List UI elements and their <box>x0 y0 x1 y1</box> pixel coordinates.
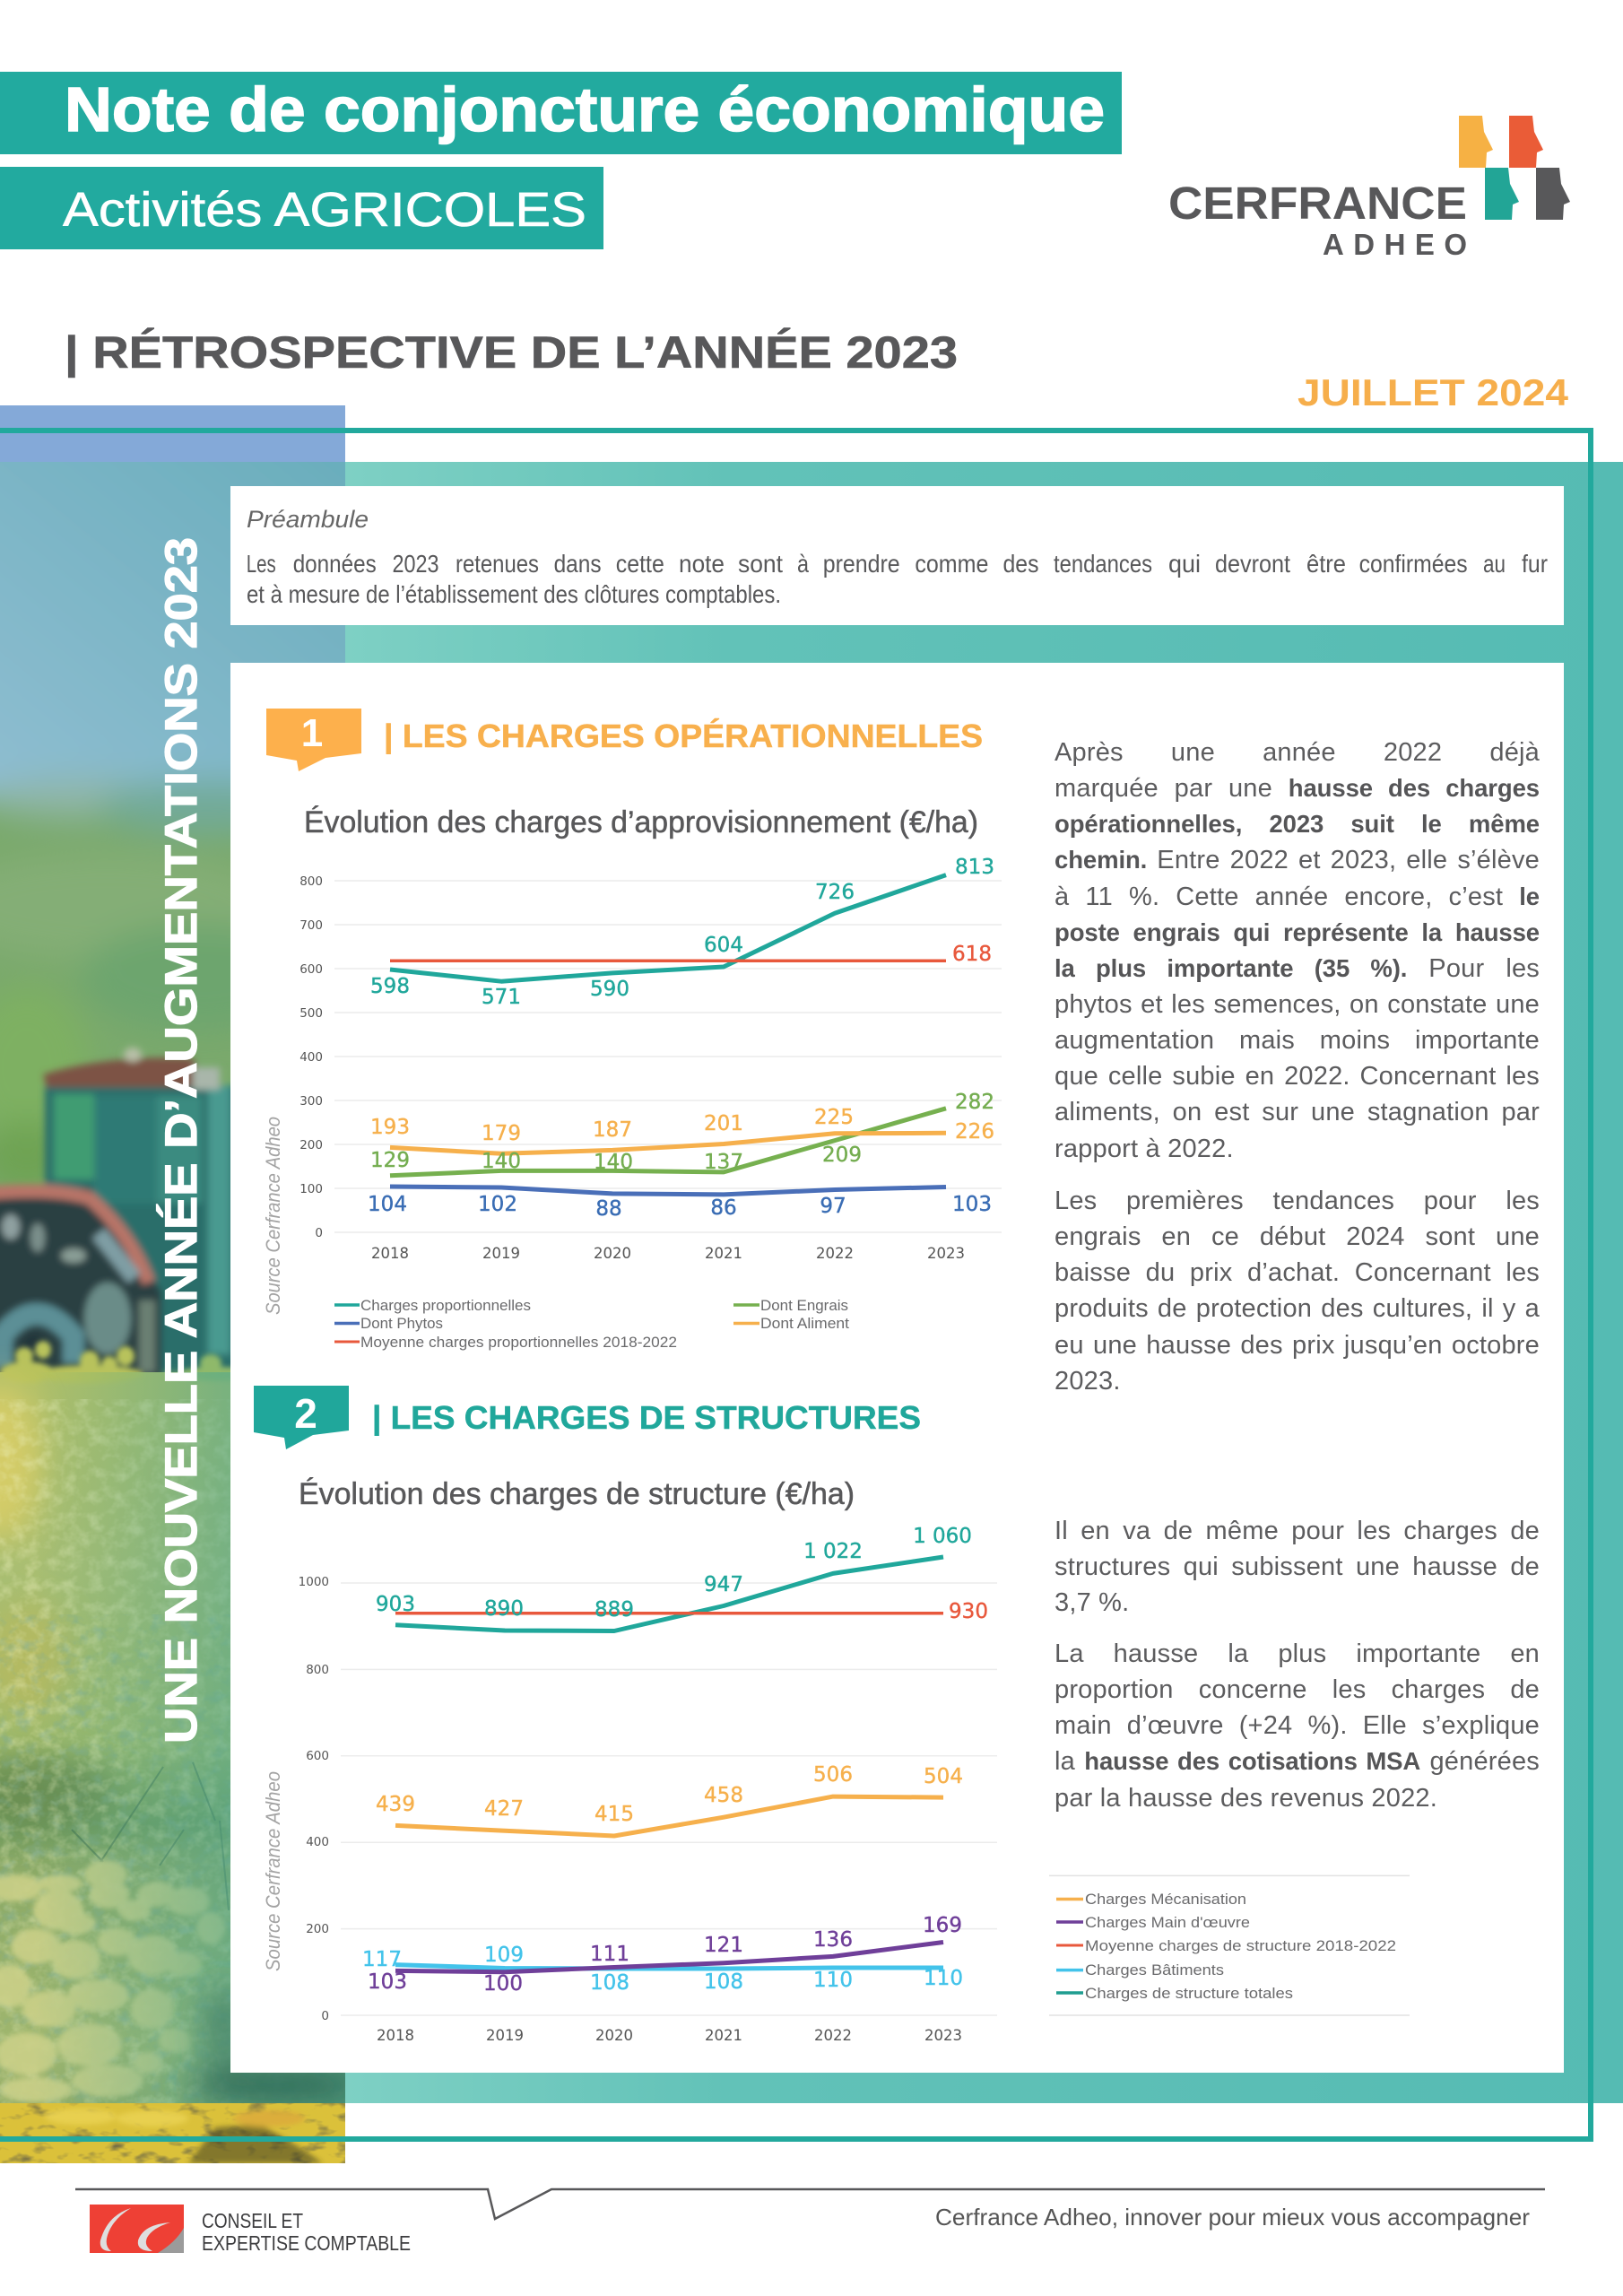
vertical headline: UNE NOUVELLE ANNÉE D’AUGMENTATIONS 2023 <box>156 537 206 1744</box>
text block: charges opérationnelles analysis: aliments, on est sur une stagnation par <box>1055 1098 1540 1126</box>
text block: charges opérationnelles analysis: la plus importante (35 %). Pour les <box>1055 954 1540 983</box>
préambule text: note <box>679 550 725 578</box>
data labels: 136 <box>813 1928 853 1952</box>
y axis: 100 <box>299 1182 323 1196</box>
text block: tendances engrais 2024: eu une hausse des prix jusqu’en octobre <box>1055 1331 1540 1360</box>
data labels: 179 <box>482 1122 521 1145</box>
préambule text: 2023 <box>393 550 439 578</box>
series lines <box>390 875 946 1195</box>
section 1 badge <box>266 709 361 771</box>
chart 2 legend: Charges Mécanisation <box>1085 1891 1246 1908</box>
chart 1 source: Source Cerfrance Adheo <box>262 1117 284 1315</box>
x axis: 2023 <box>927 1245 965 1262</box>
text block: charges opérationnelles analysis: que celle subie en 2022. Concernant les <box>1055 1062 1540 1091</box>
text block: main d'oeuvre: proportion concerne les charges de <box>1055 1675 1540 1704</box>
heading: rétrospective: | RÉTROSPECTIVE DE L’ANNÉE 2023 <box>65 327 958 378</box>
data labels: 930 <box>949 1600 988 1623</box>
préambule text: comme <box>915 550 988 578</box>
text block: charges de structures: structures qui subissent une hausse de <box>1055 1552 1540 1581</box>
text block: charges opérationnelles analysis: opérationnelles, 2023 suit le même <box>1055 810 1540 838</box>
text block: charges opérationnelles analysis: poste engrais qui représente la hausse <box>1055 918 1540 946</box>
préambule text: Les <box>247 550 276 578</box>
text block: tendances engrais 2024 <box>1055 1187 1540 1396</box>
chart 1 legend: Dont Engrais <box>760 1297 848 1314</box>
chart 2 legend: Moyenne charges de structure 2018-2022 <box>1085 1937 1396 1954</box>
flowers <box>0 1860 225 2102</box>
data labels: 225 <box>814 1106 854 1129</box>
y axis: 600 <box>299 962 323 977</box>
data labels: 86 <box>710 1196 737 1220</box>
data labels: 604 <box>704 934 743 957</box>
y axis: 200 <box>306 1922 329 1936</box>
préambule text: des <box>1002 550 1038 578</box>
logo: expert comptable <box>90 2205 184 2253</box>
y axis: 600 <box>306 1749 329 1763</box>
data labels: 903 <box>376 1593 415 1616</box>
data labels: 1 022 <box>803 1540 863 1563</box>
text block: charges opérationnelles analysis: chemin. Entre 2022 et 2023, elle s’élève <box>1055 846 1540 874</box>
préambule text: au <box>1483 550 1506 578</box>
text block: main d'oeuvre: par la hausse des revenus 2022. <box>1055 1784 1437 1813</box>
teal gradient band <box>345 462 1623 2103</box>
section 2 heading: | LES CHARGES DE STRUCTURES <box>372 1399 921 1437</box>
préambule label: Préambule <box>247 506 369 533</box>
y axis <box>299 1575 329 2023</box>
text block: charges opérationnelles analysis: phytos et les semences, on constate une <box>1055 990 1540 1019</box>
préambule text: sont <box>738 550 783 578</box>
préambule text: et à mesure de l’établissement des clôtures comptables. <box>247 580 781 608</box>
data labels: 598 <box>370 975 410 998</box>
data labels: 140 <box>482 1150 521 1173</box>
section 2 badge: 2 <box>294 1390 317 1437</box>
text block: charges de structures: Il en va de même pour les charges de <box>1055 1516 1540 1544</box>
préambule text <box>247 550 1548 608</box>
préambule text: dans <box>554 550 602 578</box>
text block: main d'oeuvre <box>1055 1639 1540 1813</box>
text block: tendances engrais 2024: engrais en ce début 2024 sont une <box>1055 1222 1540 1251</box>
data labels: 110 <box>813 1969 853 1992</box>
subtitle banner <box>0 167 603 249</box>
préambule text: tendances <box>1054 550 1152 578</box>
series lines <box>395 1557 943 1972</box>
data labels: 890 <box>484 1597 524 1621</box>
tractor <box>0 1044 230 1372</box>
chart 1 title: Évolution des charges d’approvisionnement (€/ha) <box>304 805 978 839</box>
data labels: 813 <box>955 856 994 879</box>
line chart: charges de structure <box>299 1525 997 2044</box>
x axis: 2022 <box>814 2027 852 2044</box>
footer tagline: Cerfrance Adheo, innover pour mieux vous accompagner <box>935 2204 1530 2231</box>
préambule text: qui <box>1168 550 1201 578</box>
x axis <box>371 1245 965 1262</box>
y axis: 400 <box>306 1835 329 1849</box>
data labels: 1 060 <box>913 1525 972 1548</box>
data labels: 140 <box>594 1151 633 1174</box>
data labels: 129 <box>370 1149 410 1172</box>
x axis <box>377 2027 962 2044</box>
préambule text: être <box>1306 550 1346 578</box>
y axis <box>299 874 323 1240</box>
préambule text: cette <box>616 550 664 578</box>
y axis: 0 <box>315 1226 323 1240</box>
data labels: 102 <box>478 1193 517 1216</box>
chart 2 legend: Charges de structure totales <box>1085 1985 1293 2002</box>
data labels: 100 <box>483 1972 523 1996</box>
data labels: 187 <box>593 1118 632 1142</box>
chart 1 legend: Moyenne charges proportionnelles 2018-2022 <box>360 1334 677 1351</box>
data labels: 201 <box>704 1112 743 1135</box>
préambule text: prendre <box>823 550 900 578</box>
data labels: 169 <box>923 1914 962 1937</box>
chart 2 legend: Charges Main d'œuvre <box>1085 1914 1250 1931</box>
data labels: 618 <box>952 943 992 966</box>
data labels: 506 <box>813 1763 853 1787</box>
data labels: 121 <box>704 1934 743 1957</box>
panel: main white content <box>230 663 1564 2073</box>
logo: Cerfrance Adheo: CERFRANCE <box>1168 178 1467 229</box>
chart 1 legend: Dont Aliment <box>760 1315 849 1332</box>
data labels: 109 <box>484 1944 524 1967</box>
section 1 badge: 1 <box>301 711 323 755</box>
line chart: charges d'approvisionnement <box>299 856 1002 1262</box>
x axis: 2020 <box>595 2027 633 2044</box>
data labels <box>368 856 994 1221</box>
photo strip: tractor in rapeseed field <box>0 405 345 2163</box>
logo: Cerfrance Adheo <box>1168 116 1570 261</box>
section 2 badge <box>254 1386 349 1449</box>
préambule text: données <box>293 550 377 578</box>
préambule text: devront <box>1215 550 1290 578</box>
x axis: 2018 <box>371 1245 409 1262</box>
text block: charges opérationnelles analysis: rapport à 2022. <box>1055 1135 1234 1163</box>
data labels: 427 <box>484 1797 524 1821</box>
x axis: 2021 <box>705 1245 742 1262</box>
data labels: 193 <box>370 1116 410 1139</box>
x axis: 2023 <box>924 2027 962 2044</box>
accreditation text: EXPERTISE COMPTABLE <box>202 2231 411 2255</box>
data labels: 590 <box>590 978 629 1001</box>
data labels: 108 <box>704 1970 743 1994</box>
y axis: 200 <box>299 1138 323 1152</box>
data labels: 439 <box>376 1793 415 1816</box>
field edge <box>0 1341 251 1383</box>
data labels: 282 <box>955 1091 994 1114</box>
accreditation text: CONSEIL ET <box>202 2209 303 2232</box>
x axis: 2019 <box>486 2027 524 2044</box>
text block: tendances engrais 2024: produits de protection des cultures, il y a <box>1055 1294 1540 1323</box>
y axis: 800 <box>306 1663 329 1677</box>
préambule text: confirmées <box>1359 550 1468 578</box>
accreditation text <box>202 2209 411 2255</box>
data labels: 103 <box>952 1193 992 1216</box>
date: JUILLET 2024 <box>1298 371 1569 413</box>
data labels: 108 <box>590 1971 629 1995</box>
chart 1 legend: Charges proportionnelles <box>360 1297 531 1314</box>
data labels: 103 <box>368 1970 407 1994</box>
data labels: 458 <box>704 1784 743 1807</box>
panel: préambule <box>230 486 1564 625</box>
title banner: Note de conjoncture économique <box>65 74 1105 144</box>
préambule text: fur <box>1522 550 1548 578</box>
data labels <box>362 1525 988 1996</box>
data labels: 415 <box>595 1803 634 1826</box>
text block: charges de structures: 3,7 %. <box>1055 1588 1129 1617</box>
chart 2 source: Source Cerfrance Adheo <box>262 1771 284 1971</box>
text block: charges opérationnelles analysis: augmentation mais moins importante <box>1055 1026 1540 1055</box>
text block: charges opérationnelles analysis: Après une année 2022 déjà <box>1055 738 1540 767</box>
text block: tendances engrais 2024: baisse du prix d’achat. Concernant les <box>1055 1258 1540 1287</box>
text block: main d'oeuvre: La hausse la plus importante en <box>1055 1639 1540 1668</box>
chart 2 legend <box>1049 1875 1410 2015</box>
x axis: 2020 <box>594 1245 631 1262</box>
data labels: 947 <box>704 1573 743 1596</box>
y axis: 400 <box>299 1050 323 1065</box>
x axis: 2021 <box>705 2027 742 2044</box>
text block: charges opérationnelles analysis: à 11 %. Cette année encore, c’est le <box>1055 883 1540 911</box>
y axis: 700 <box>299 918 323 933</box>
préambule text: à <box>797 550 809 578</box>
data labels: 137 <box>704 1151 743 1174</box>
footer speech-bubble rule <box>75 2189 1545 2219</box>
chart 2 title: Évolution des charges de structure (€/ha) <box>299 1477 855 1511</box>
subtitle banner: Activités AGRICOLES <box>63 183 586 237</box>
data labels: 117 <box>362 1948 402 1971</box>
text block: charges de structures <box>1055 1516 1540 1617</box>
data labels: 104 <box>368 1193 407 1216</box>
teal frame <box>0 430 1591 2139</box>
préambule text: retenues <box>456 550 539 578</box>
y axis: 1000 <box>299 1575 329 1589</box>
x axis: 2019 <box>482 1245 520 1262</box>
text block: main d'oeuvre: la hausse des cotisations MSA générées <box>1055 1747 1540 1776</box>
data labels: 209 <box>822 1144 862 1167</box>
chart 1 legend <box>334 1297 849 1351</box>
x axis: 2022 <box>816 1245 854 1262</box>
text block: tendances engrais 2024: 2023. <box>1055 1367 1121 1396</box>
chart 2 legend: Charges Bâtiments <box>1085 1961 1224 1979</box>
data labels: 111 <box>590 1943 629 1966</box>
data labels: 504 <box>924 1765 963 1788</box>
section 1 heading: | LES CHARGES OPÉRATIONNELLES <box>384 718 983 755</box>
data labels: 88 <box>595 1197 622 1221</box>
y axis: 300 <box>299 1094 323 1109</box>
y axis: 0 <box>321 2009 329 2023</box>
data labels: 889 <box>595 1598 634 1622</box>
data labels: 97 <box>820 1195 846 1218</box>
data labels: 110 <box>924 1967 963 1990</box>
data labels: 726 <box>815 881 855 904</box>
text block: charges opérationnelles analysis <box>1055 738 1540 1163</box>
field stems <box>72 1762 229 1910</box>
y axis: 500 <box>299 1006 323 1021</box>
data labels: 571 <box>482 986 521 1009</box>
chart 1 legend: Dont Phytos <box>360 1315 443 1332</box>
logo: Cerfrance Adheo: ADHEO <box>1323 228 1467 261</box>
text block: tendances engrais 2024: Les premières tendances pour les <box>1055 1187 1540 1215</box>
y axis: 800 <box>299 874 323 889</box>
x axis: 2018 <box>377 2027 414 2044</box>
text block: charges opérationnelles analysis: marquée par une hausse des charges <box>1055 774 1540 803</box>
data labels: 226 <box>955 1120 994 1144</box>
